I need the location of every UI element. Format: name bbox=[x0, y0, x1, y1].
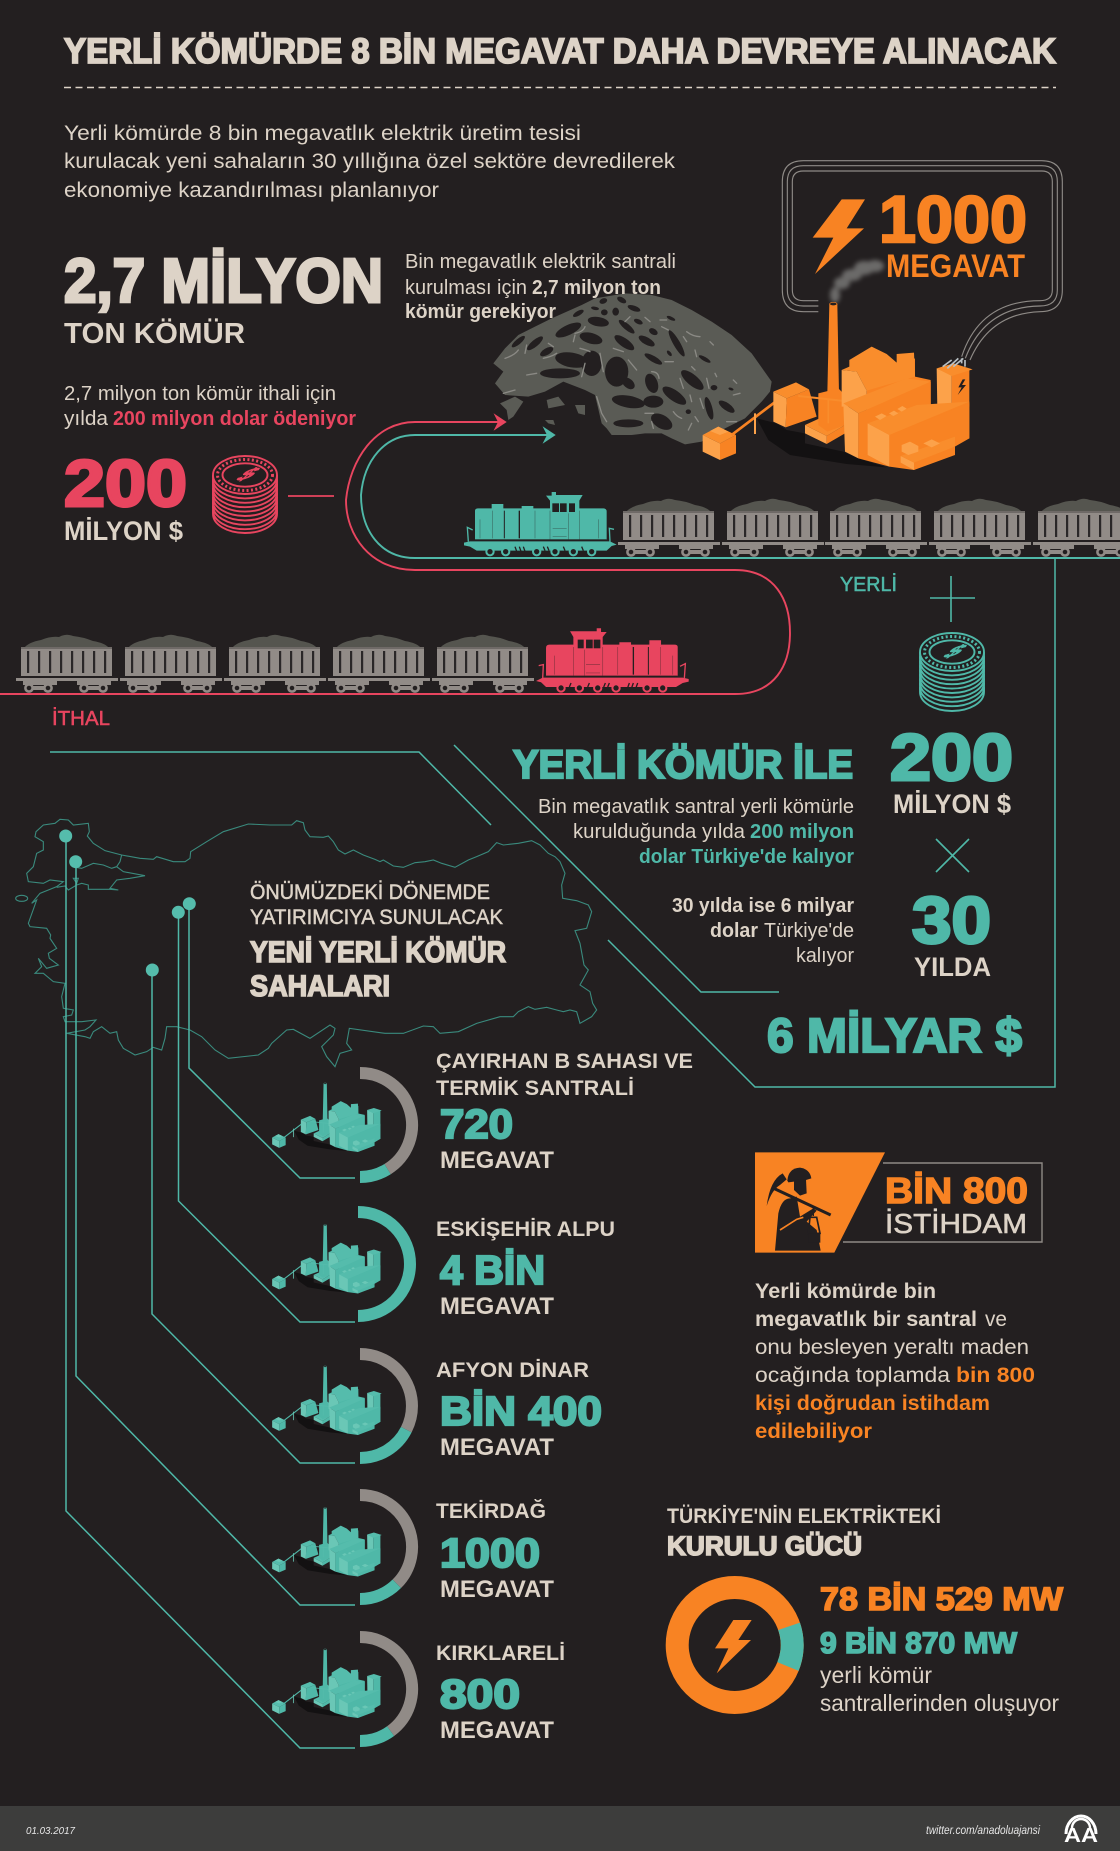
site labels: 800 bbox=[440, 1671, 520, 1717]
import cost text bbox=[64, 383, 356, 430]
map heading: YATIRIMCIYA SUNULACAK bbox=[250, 906, 503, 929]
site labels: TEKİRDAĞ bbox=[436, 1499, 546, 1523]
site: Çayırhan bbox=[272, 1050, 693, 1177]
icon: plant tower bolt bbox=[958, 379, 966, 395]
site labels: 1000 bbox=[440, 1530, 540, 1576]
30 yılda statistic: YILDA bbox=[914, 952, 991, 982]
installed power figures: santrallerinden oluşuyor bbox=[820, 1690, 1059, 1716]
import cost text: 200 milyon dolar ödeniyor bbox=[113, 408, 356, 430]
icon: donut lightning bolt bbox=[715, 1620, 752, 1673]
footer bar bbox=[0, 1806, 1120, 1851]
domestic coal explanation: dolar Türkiye'de kalıyor bbox=[639, 846, 854, 868]
coal pile bbox=[493, 293, 772, 444]
teal locomotive bbox=[464, 492, 617, 555]
installed power figures: 9 BİN 870 MW bbox=[820, 1627, 1018, 1660]
site labels: KIRKLARELİ bbox=[436, 1642, 565, 1665]
thirty year text: Türkiye'de bbox=[764, 920, 854, 942]
200 milyon dollar red statistic: 200 bbox=[64, 446, 187, 520]
site labels: ESKİŞEHİR ALPU bbox=[436, 1218, 615, 1241]
teal plant icon bbox=[272, 1366, 382, 1435]
site: Afyon Dinar bbox=[272, 1354, 602, 1461]
installed power figures: yerli kömür bbox=[820, 1662, 932, 1688]
coal requirement text: kurulması için bbox=[405, 277, 527, 299]
red import route arrow bbox=[0, 416, 790, 694]
site: Eskişehir Alpu bbox=[272, 1212, 615, 1320]
title: YERLİ KÖMÜRDE 8 BİN MEGAVAT DAHA DEVREYE ALINACAK bbox=[64, 32, 1056, 71]
employment text: kişi doğrudan istihdam bbox=[755, 1392, 990, 1415]
2,7 milyon ton kömür statistic bbox=[64, 247, 383, 350]
icon: teal coin stack: $ bbox=[937, 640, 974, 662]
200 milyon dollar red statistic bbox=[64, 446, 187, 546]
employment text: ve bbox=[985, 1308, 1007, 1331]
thirty year text: kalıyor bbox=[796, 945, 854, 967]
capacity arc bbox=[360, 1073, 412, 1177]
teal plant icon bbox=[272, 1649, 382, 1718]
site labels: ÇAYIRHAN B SAHASI VE bbox=[436, 1050, 693, 1073]
icon: agency logo: AA bbox=[1064, 1825, 1098, 1847]
employment badge: İSTİHDAM bbox=[885, 1208, 1027, 1239]
intro text: ekonomiye kazandırılması planlanıyor bbox=[64, 179, 439, 202]
200 milyon dollar teal statistic bbox=[890, 720, 1013, 819]
map of Turkey bbox=[16, 819, 597, 1067]
map heading: SAHALARI bbox=[250, 970, 390, 1003]
site labels: MEGAVAT bbox=[440, 1434, 554, 1461]
200 milyon dollar teal statistic: 200 bbox=[890, 720, 1013, 794]
donut chart bbox=[677, 1588, 792, 1702]
map heading: ÖNÜMÜZDEKİ DÖNEMDE bbox=[250, 881, 490, 904]
site: Kırklareli bbox=[272, 1637, 565, 1744]
icon: multiply sign bbox=[936, 839, 969, 872]
site labels: 720 bbox=[440, 1101, 513, 1147]
capacity arc bbox=[360, 1495, 412, 1599]
site labels: BİN 400 bbox=[440, 1388, 602, 1434]
wire connectors bbox=[943, 358, 965, 368]
teal plant icon bbox=[272, 1224, 382, 1294]
employment text bbox=[755, 1280, 1035, 1443]
site: Tekirdağ bbox=[272, 1495, 554, 1603]
twitter handle: twitter.com/anadoluajansi bbox=[926, 1823, 1040, 1837]
icon: red coin stack: $ bbox=[230, 463, 267, 485]
installed power figures bbox=[820, 1581, 1064, 1716]
site labels: AFYON DİNAR bbox=[436, 1359, 589, 1382]
site labels bbox=[436, 1050, 693, 1174]
site labels: TERMİK SANTRALİ bbox=[436, 1077, 634, 1100]
employment text: onu besleyen yeraltı maden bbox=[755, 1336, 1029, 1359]
site labels: MEGAVAT bbox=[440, 1717, 554, 1744]
employment text: ocağında toplamda bbox=[755, 1364, 950, 1387]
2,7 milyon ton kömür statistic: 2,7 MİLYON bbox=[64, 247, 383, 316]
domestic coal explanation: 200 milyon bbox=[750, 821, 854, 843]
coal requirement text: 2,7 milyon ton bbox=[532, 277, 661, 299]
employment text: megavatlık bir santral bbox=[755, 1308, 977, 1331]
date: 01.03.2017 bbox=[26, 1826, 75, 1837]
30 yılda statistic bbox=[912, 883, 991, 982]
teal plant icon bbox=[272, 1083, 382, 1152]
200 milyon dollar teal statistic: MİLYON $ bbox=[893, 789, 1011, 819]
installed power heading bbox=[667, 1505, 941, 1561]
red locomotive bbox=[536, 628, 689, 692]
30 yılda statistic: 30 bbox=[912, 883, 991, 957]
200 milyon dollar red statistic: MİLYON $ bbox=[64, 516, 183, 546]
employment text: bin 800 bbox=[956, 1364, 1035, 1387]
employment text: edilebiliyor bbox=[755, 1420, 872, 1443]
site labels: MEGAVAT bbox=[440, 1293, 554, 1320]
employment badge bbox=[755, 1152, 1042, 1253]
2,7 milyon ton kömür statistic: TON KÖMÜR bbox=[64, 317, 245, 350]
domestic coal explanation: kurulduğunda yılda bbox=[573, 821, 746, 843]
site labels: MEGAVAT bbox=[440, 1147, 554, 1174]
import cost text: yılda bbox=[64, 408, 109, 430]
intro text: Yerli kömürde 8 bin megavatlık elektrik üretim tesisi bbox=[64, 122, 581, 145]
map heading bbox=[250, 881, 506, 1003]
6 milyar dollar total: 6 MİLYAR $ bbox=[767, 1010, 1022, 1063]
teal domestic route arrow bbox=[361, 429, 1120, 558]
installed power figures: 78 BİN 529 MW bbox=[820, 1581, 1064, 1617]
icon: large orange lightning bolt bbox=[813, 199, 865, 274]
1000 megavat label: MEGAVAT bbox=[886, 248, 1025, 284]
capacity arc bbox=[358, 1212, 410, 1316]
orange power plant bbox=[703, 302, 973, 470]
site labels: 4 BİN bbox=[440, 1247, 545, 1293]
capacity arc bbox=[360, 1354, 412, 1458]
teal plant icon bbox=[272, 1507, 382, 1576]
site labels bbox=[436, 1359, 602, 1461]
domestic coal explanation: Bin megavatlık santral yerli kömürle bbox=[538, 796, 854, 818]
import cost text: 2,7 milyon ton kömür ithali için bbox=[64, 383, 336, 405]
smoke bbox=[830, 260, 884, 303]
domestic coal explanation bbox=[538, 796, 854, 868]
coal requirement text bbox=[405, 251, 676, 323]
icon: miner bbox=[755, 1152, 885, 1253]
1000 megavat label: 1000 bbox=[879, 182, 1027, 256]
icon: plus sign bbox=[930, 576, 975, 622]
thirty year text bbox=[672, 895, 854, 967]
yerli label: YERLİ bbox=[840, 573, 897, 596]
map pins and leader lines bbox=[59, 830, 355, 1748]
teal train wagons bbox=[618, 499, 1120, 556]
installed power heading: TÜRKİYE'NİN ELEKTRİKTEKİ bbox=[667, 1505, 941, 1528]
red train wagons bbox=[16, 635, 534, 692]
capacity arc bbox=[360, 1637, 412, 1741]
icon: red coin stack bbox=[213, 456, 277, 533]
intro text: kurulacak yeni sahaların 30 yıllığına özel sektöre devredilerek bbox=[64, 150, 676, 173]
installed power heading: KURULU GÜCÜ bbox=[667, 1531, 862, 1561]
site labels bbox=[436, 1499, 554, 1603]
ithal label: İTHAL bbox=[52, 707, 110, 730]
intro text bbox=[64, 122, 676, 202]
icon: agency logo bbox=[1064, 1816, 1098, 1847]
employment text: Yerli kömürde bin bbox=[755, 1280, 936, 1303]
icon: teal coin stack bbox=[920, 633, 984, 711]
site labels bbox=[436, 1218, 615, 1320]
teal frame lines bbox=[50, 558, 1055, 1087]
map heading: YENİ YERLİ KÖMÜR bbox=[250, 936, 506, 969]
thirty year text: dolar bbox=[710, 920, 758, 942]
speech bubble with wires bbox=[782, 161, 1062, 360]
coal requirement text: kömür gerekiyor bbox=[405, 301, 556, 323]
yerli kömür ile heading: YERLİ KÖMÜR İLE bbox=[513, 742, 853, 787]
site labels bbox=[436, 1642, 565, 1744]
coal requirement text: Bin megavatlık elektrik santrali bbox=[405, 251, 676, 273]
badge text: BİN 800 bbox=[885, 1170, 1028, 1211]
thirty year text: 30 yılda ise 6 milyar bbox=[672, 895, 854, 917]
site labels: MEGAVAT bbox=[440, 1576, 554, 1603]
